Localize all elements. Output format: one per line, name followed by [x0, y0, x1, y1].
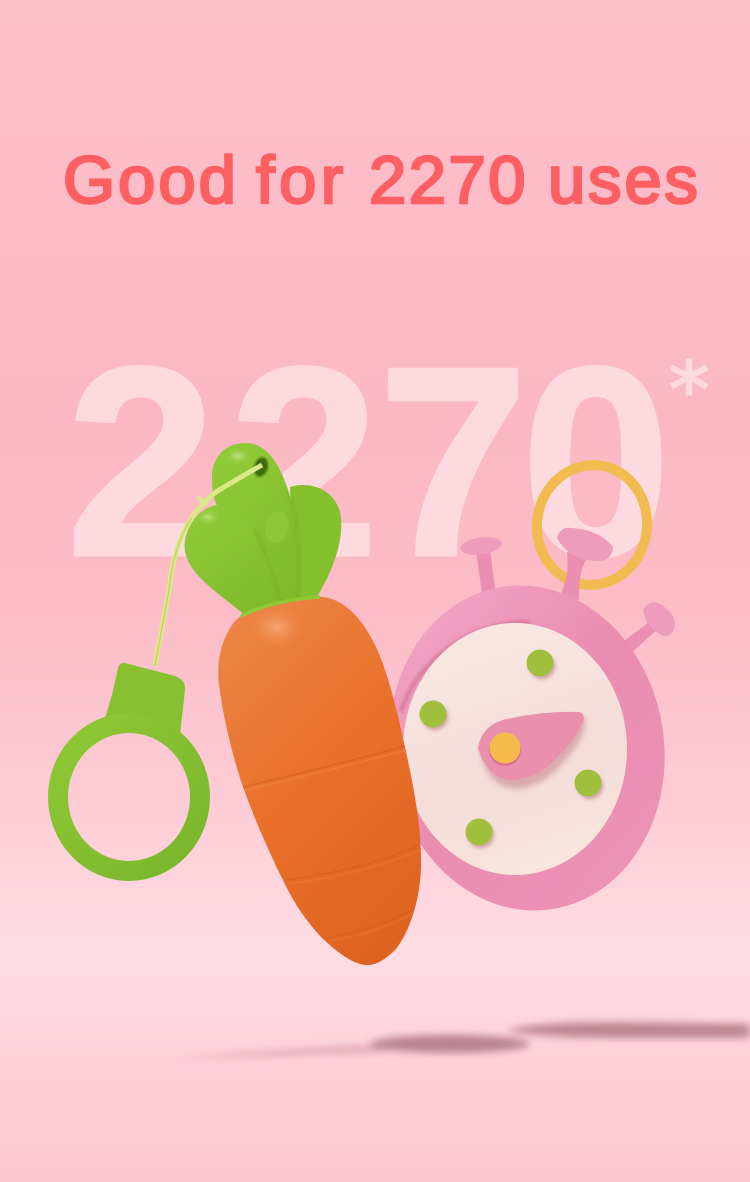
button: right [620, 602, 675, 654]
carrot ridges [243, 746, 420, 941]
button: center [557, 528, 613, 600]
yellow ring [529, 458, 655, 592]
title: uses [548, 143, 701, 218]
carrot body [218, 597, 421, 965]
carrot leaf rim [241, 597, 320, 616]
title: Good [63, 143, 239, 218]
cord hole [252, 456, 270, 478]
stopwatch body [366, 566, 688, 930]
clock hand [478, 712, 586, 789]
title: 2270 [369, 143, 528, 218]
stopwatch rim inner shadow [401, 622, 530, 712]
lanyard cord [155, 465, 262, 666]
lanyard ring [58, 663, 200, 871]
floor shadows [170, 1022, 750, 1060]
title: for [256, 143, 348, 218]
large number 2270: 2270 [66, 312, 671, 613]
icon: stopwatch [366, 458, 688, 930]
button: left [459, 535, 503, 594]
leaves [185, 443, 341, 615]
carrot highlight [249, 605, 305, 649]
asterisk: * [668, 344, 710, 437]
icon: carrot [58, 443, 421, 965]
stopwatch face [403, 623, 627, 875]
hour dots [420, 650, 604, 848]
